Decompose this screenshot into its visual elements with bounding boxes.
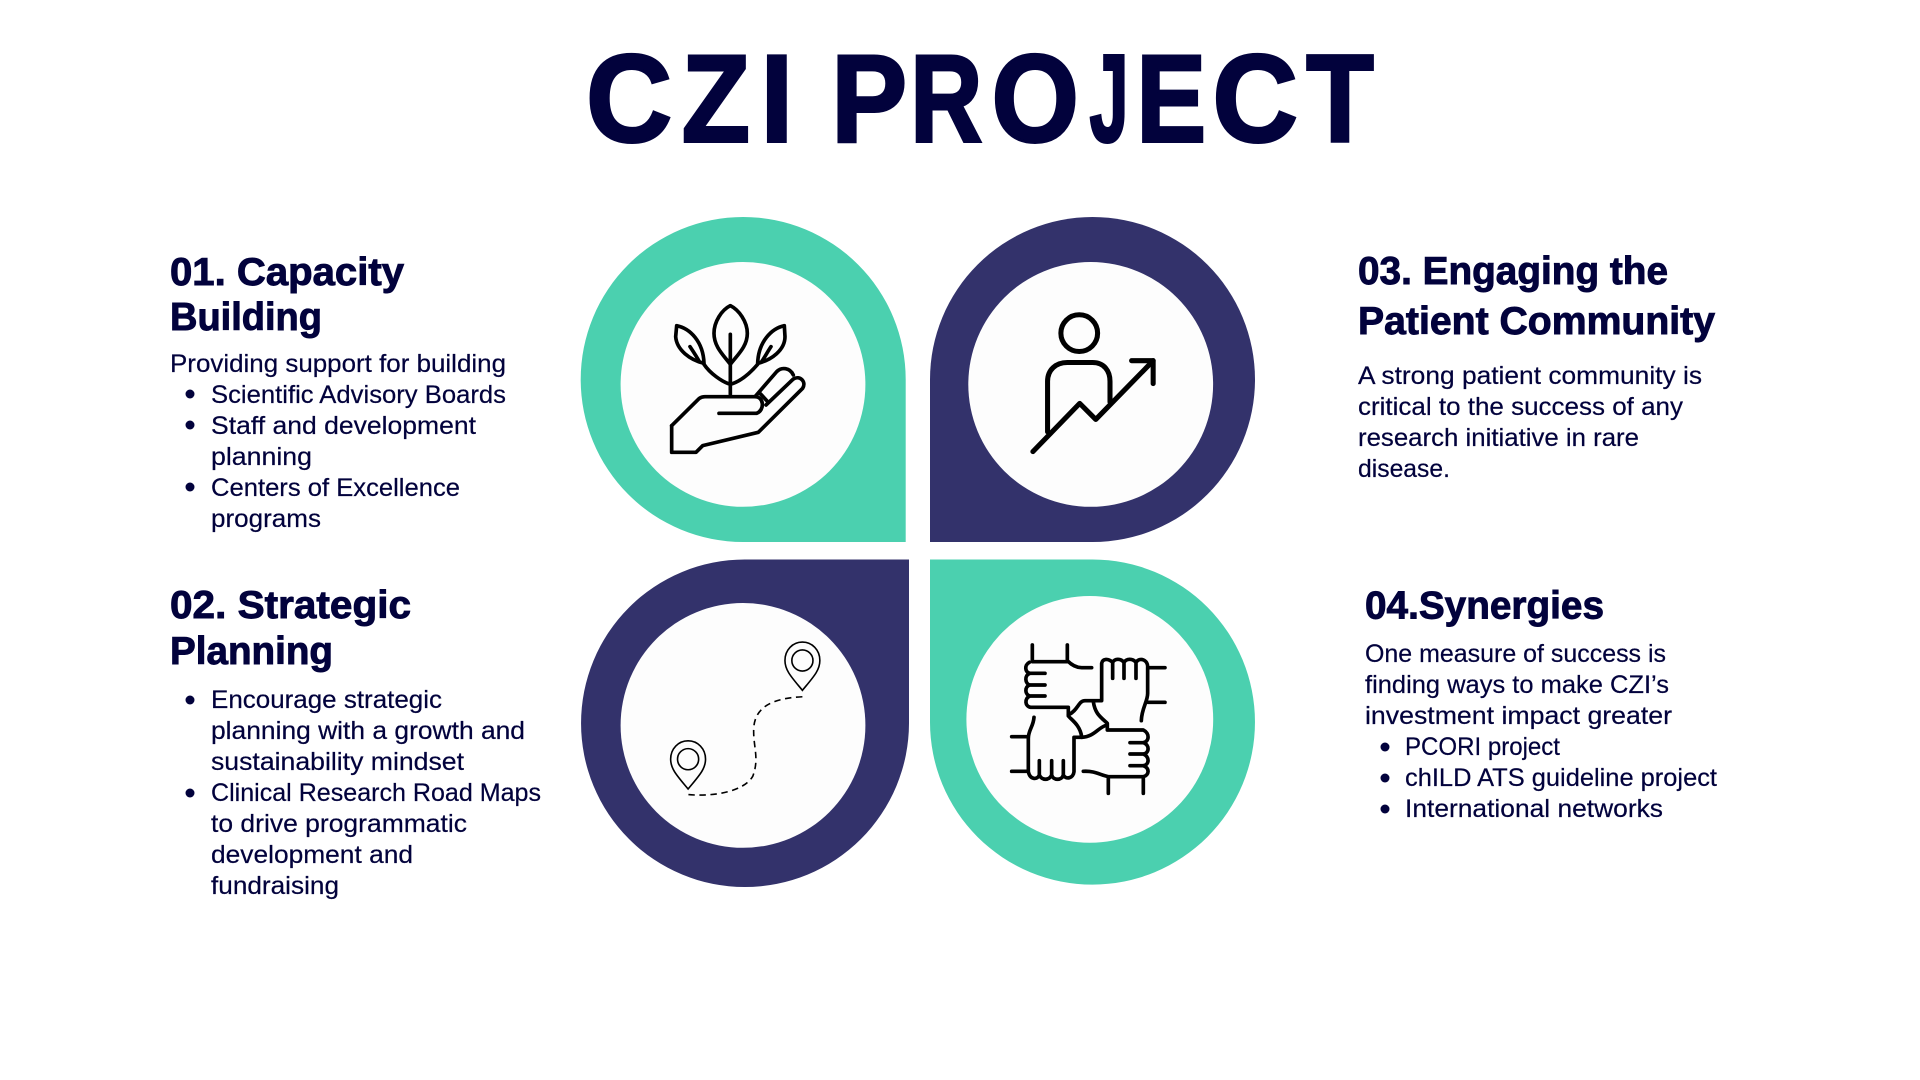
text block: capacity building details: Staff and development xyxy=(211,412,476,440)
title: Z xyxy=(682,30,750,168)
title: E xyxy=(1136,30,1206,168)
heading: 02 strategic planning: Planning xyxy=(170,630,333,673)
text block: synergies details: investment impact greater xyxy=(1365,702,1672,730)
panel: bottom-right teal petal xyxy=(930,560,1255,885)
text block: strategic planning details: Encourage strategic xyxy=(211,686,442,714)
text block: synergies details: finding ways to make CZI’s xyxy=(1365,671,1669,699)
text block: capacity building details: Providing support for building xyxy=(170,350,506,378)
text block: capacity building details xyxy=(170,350,506,533)
panel: top-right navy petal xyxy=(930,217,1255,542)
panel: bottom-left navy petal xyxy=(581,560,909,887)
heading: 02 strategic planning xyxy=(170,584,411,673)
heading: 01 capacity building xyxy=(170,251,405,339)
heading: 03 engaging the patient community: 03. Engaging the xyxy=(1358,250,1668,293)
title: J xyxy=(1090,30,1128,168)
text block: synergies details: chILD ATS guideline project xyxy=(1405,764,1717,792)
icon: four interlocking hands xyxy=(1012,645,1165,793)
text block: synergies details: One measure of success is xyxy=(1365,640,1666,668)
text block: strategic planning details xyxy=(186,686,541,900)
text block: patient community details: A strong patient community is xyxy=(1358,362,1702,390)
text block: strategic planning details: planning with a growth and xyxy=(211,717,525,745)
text block: strategic planning details: development and xyxy=(211,841,413,869)
text block: patient community details xyxy=(1358,362,1702,483)
heading: 04 synergies: 04.Synergies xyxy=(1365,584,1604,628)
text block: strategic planning details: to drive programmatic xyxy=(211,810,467,838)
title: C xyxy=(1212,30,1298,168)
title: I xyxy=(760,30,793,168)
title: R xyxy=(910,30,982,168)
heading: 03 engaging the patient community xyxy=(1358,250,1716,343)
title: P xyxy=(831,30,907,168)
text block: synergies details: International networks xyxy=(1405,795,1663,823)
panel: top-left teal petal xyxy=(581,217,906,542)
icon: person with rising arrow xyxy=(1033,315,1153,452)
heading: 01 capacity building: 01. Capacity xyxy=(170,251,405,294)
title: O xyxy=(992,30,1079,168)
panel: synergies text xyxy=(1365,584,1717,823)
text block: synergies details: PCORI project xyxy=(1405,733,1560,761)
text block: capacity building details: planning xyxy=(211,443,312,471)
text block: patient community details: critical to the success of any xyxy=(1358,393,1684,421)
heading: 02 strategic planning: 02. Strategic xyxy=(170,584,411,627)
text block: capacity building details: Centers of Excellence xyxy=(211,474,460,502)
text block: strategic planning details: fundraising xyxy=(211,872,339,900)
text block: strategic planning details: Clinical Research Road Maps xyxy=(211,779,541,807)
text block: patient community details: research initiative in rare xyxy=(1358,424,1639,452)
panel: engaging the patient community text xyxy=(1358,250,1716,483)
text block: synergies details xyxy=(1365,640,1717,823)
panel: strategic planning text xyxy=(170,584,541,900)
heading: 03 engaging the patient community: Patient Community xyxy=(1358,300,1716,343)
text block: patient community details: disease. xyxy=(1358,455,1450,483)
text block: capacity building details: programs xyxy=(211,505,321,533)
icon: route between map pins xyxy=(671,642,820,795)
title: C xyxy=(586,30,672,168)
heading: 01 capacity building: Building xyxy=(170,296,322,339)
text block: strategic planning details: sustainability mindset xyxy=(211,748,464,776)
panel: capacity building text xyxy=(170,251,506,533)
text block: capacity building details: Scientific Advisory Boards xyxy=(211,381,506,409)
title: T xyxy=(1306,30,1374,168)
icon: hand holding plant xyxy=(672,306,804,452)
